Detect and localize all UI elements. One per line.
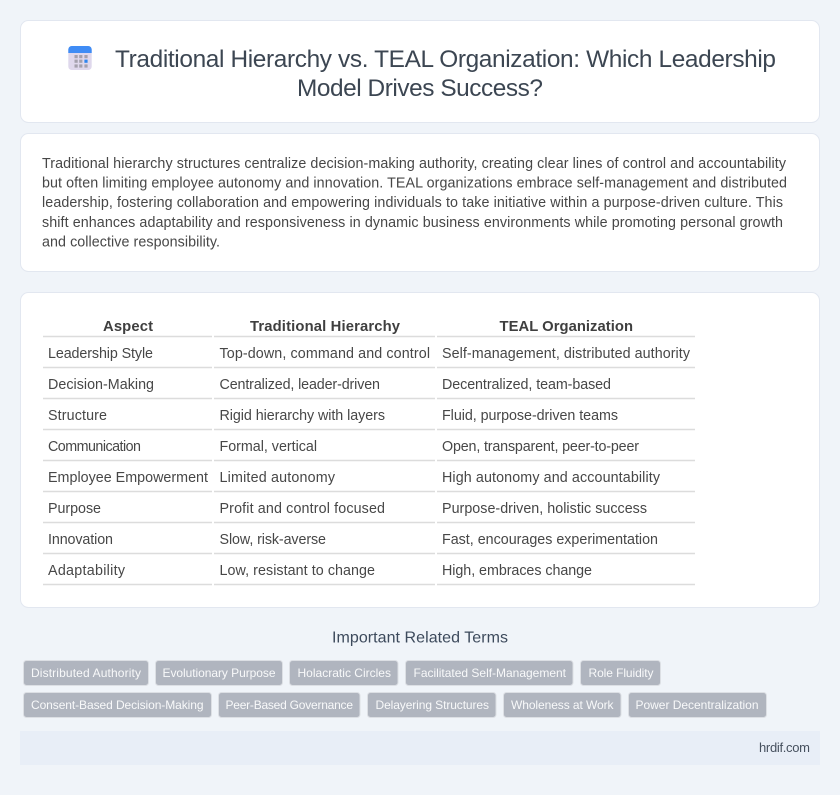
row: leadership style: Self-management, distributed authority — [442, 346, 691, 362]
heading: important related terms: Important Related Terms — [332, 630, 508, 647]
text block: intro paragraph: Traditional hierarchy structures centralize decision-making authority, creating clear lines of control and accountability — [42, 156, 787, 172]
row: leadership style: Top-down, command and control — [220, 346, 430, 362]
row: employee empowerment — [48, 470, 661, 486]
row: innovation: Innovation — [48, 532, 113, 548]
row: communication: Open, transparent, peer-to-peer — [442, 439, 639, 455]
tag: Peer-Based Governance: Peer-Based Governance — [226, 698, 353, 712]
row: communication: Formal, vertical — [220, 439, 317, 455]
row: innovation: Slow, risk-averse — [220, 532, 326, 548]
row: adaptability: Low, resistant to change — [220, 563, 375, 579]
tag: Power Decentralization — [628, 692, 766, 718]
row: purpose: Purpose — [48, 501, 101, 517]
tag: Evolutionary Purpose — [156, 660, 282, 686]
row: decision-making: Decision-Making — [48, 377, 154, 393]
tag: Peer-Based Governance — [218, 692, 360, 718]
row: structure: Rigid hierarchy with layers — [220, 408, 385, 424]
row: structure: Structure — [48, 408, 107, 424]
row: innovation: Fast, encourages experimentation — [442, 532, 658, 548]
tag: Facilitated Self-Management: Facilitated Self-Management — [414, 666, 567, 680]
tag: Delayering Structures: Delayering Structures — [376, 698, 489, 712]
title: Traditional Hierarchy vs. TEAL Organization: Which Leadership — [115, 46, 776, 73]
tag: Consent-Based Decision-Making — [24, 692, 212, 718]
row: structure: Fluid, purpose-driven teams — [442, 408, 618, 424]
text block: intro paragraph: leadership, fostering collaboration and empowering individuals to take initiative within a purpose-driven culture. This — [42, 195, 783, 211]
tag: Wholeness at Work — [504, 692, 621, 718]
row: communication — [48, 439, 639, 455]
footer bar — [20, 731, 820, 765]
row: purpose: Purpose-driven, holistic success — [442, 501, 647, 517]
row: decision-making: Centralized, leader-driven — [220, 377, 380, 393]
table header row — [103, 319, 633, 335]
panel: comparison table — [20, 292, 820, 608]
footer text: hrdif.com: hrdif.com — [759, 740, 810, 755]
tag: Holacratic Circles — [290, 660, 398, 686]
text block: intro paragraph: and collective responsibility. — [42, 234, 220, 250]
tag: Evolutionary Purpose: Evolutionary Purpose — [162, 666, 276, 680]
title: Model Drives Success? — [297, 75, 543, 102]
tag group: related terms — [24, 660, 766, 718]
row: communication: Communication — [48, 439, 141, 455]
panel: description — [20, 134, 820, 272]
row: adaptability: High, embraces change — [442, 563, 592, 579]
icon: calendar — [68, 46, 92, 70]
tag: Facilitated Self-Management — [406, 660, 573, 686]
row: employee empowerment: High autonomy and accountability — [442, 470, 661, 486]
row: purpose — [48, 501, 647, 517]
tag: Delayering Structures — [368, 692, 496, 718]
row: innovation — [48, 532, 658, 548]
row: decision-making: Decentralized, team-based — [442, 377, 611, 393]
text block: intro paragraph: but often limiting employee autonomy and innovation. TEAL organizations embrace self-management and distributed — [42, 176, 787, 192]
row: purpose: Profit and control focused — [220, 501, 385, 517]
title — [115, 46, 776, 102]
table header row: Traditional Hierarchy — [250, 319, 401, 335]
table grid lines — [43, 336, 695, 584]
row: employee empowerment: Limited autonomy — [220, 470, 336, 486]
tag: Consent-Based Decision-Making: Consent-Based Decision-Making — [31, 698, 204, 712]
tag: Distributed Authority: Distributed Authority — [31, 666, 141, 680]
text block: intro paragraph — [42, 156, 787, 250]
table header row: Aspect — [103, 319, 153, 335]
panel: header — [20, 20, 820, 122]
tag: Role Fluidity: Role Fluidity — [588, 666, 654, 680]
table header row: TEAL Organization — [500, 319, 633, 335]
tag: Power Decentralization: Power Decentralization — [636, 698, 758, 712]
text block: intro paragraph: shift enhances adaptability and responsiveness in dynamic business environments while promoting personal growth — [42, 215, 783, 231]
tag: Role Fluidity — [580, 660, 660, 686]
row: employee empowerment: Employee Empowerment — [48, 470, 208, 486]
row: leadership style: Leadership Style — [48, 346, 153, 362]
row: adaptability — [48, 563, 592, 579]
row: leadership style — [48, 346, 691, 362]
row: decision-making — [48, 377, 611, 393]
tag: Distributed Authority — [24, 660, 148, 686]
tag: Wholeness at Work: Wholeness at Work — [511, 698, 614, 712]
row: structure — [48, 408, 618, 424]
row: adaptability: Adaptability — [48, 563, 126, 579]
tag: Holacratic Circles: Holacratic Circles — [298, 666, 391, 680]
